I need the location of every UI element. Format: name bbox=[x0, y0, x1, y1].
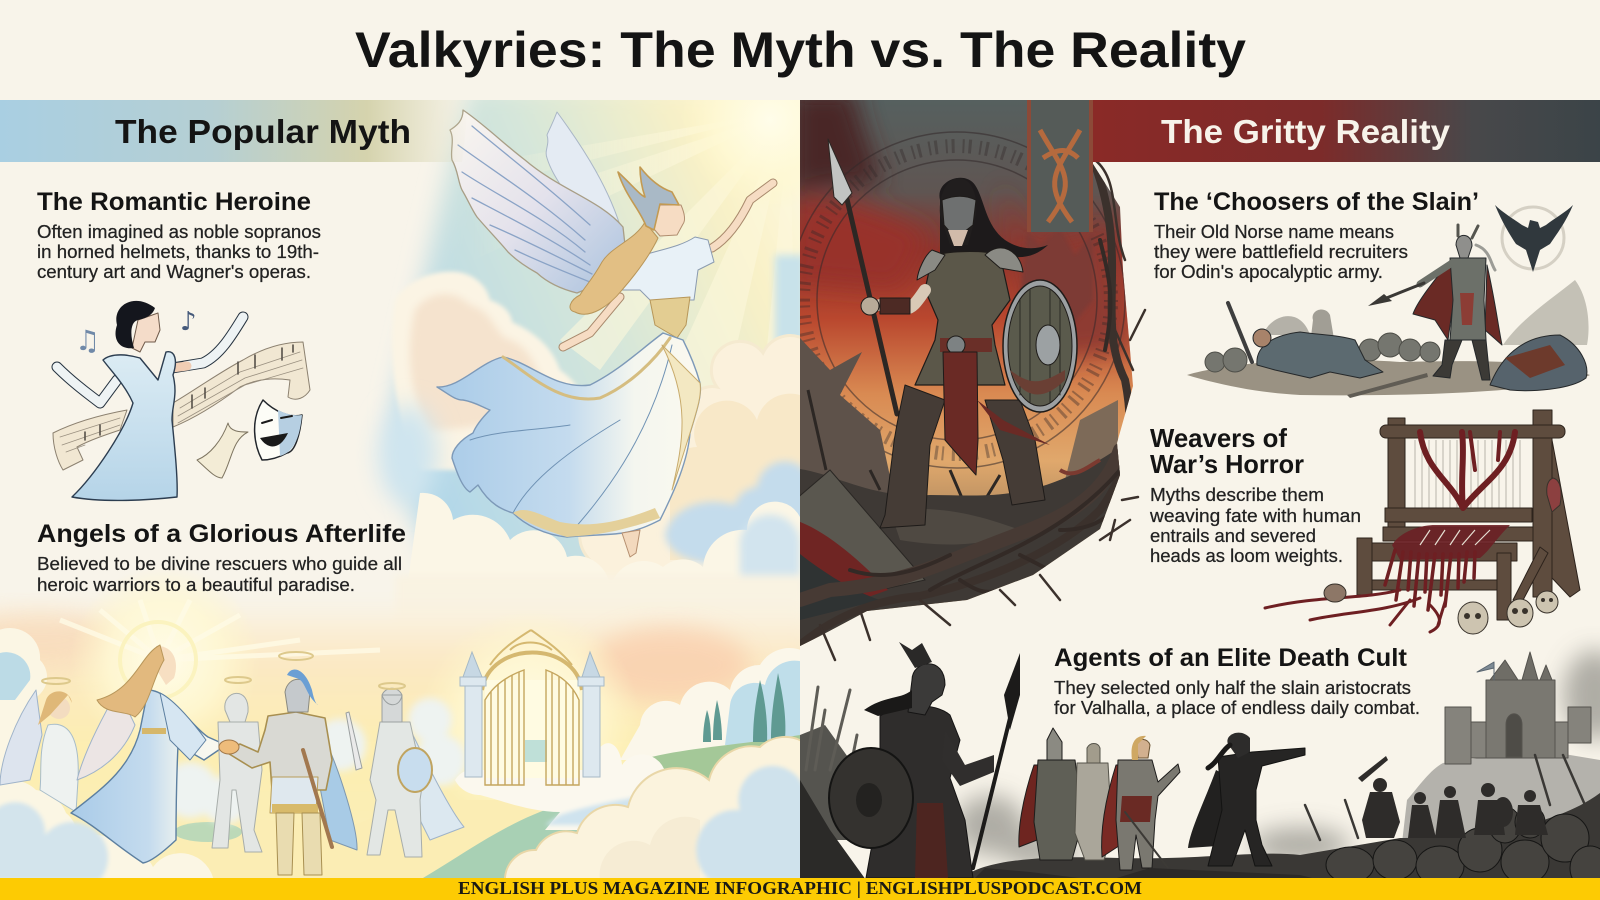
icon: soft clouds behind figures bbox=[162, 698, 466, 824]
footer bar: ENGLISH PLUS MAGAZINE INFOGRAPHIC | ENGLISHPLUSPODCAST.COM bbox=[458, 878, 1142, 898]
icon: castle flag bbox=[1477, 662, 1494, 680]
icon: pale warrior bbox=[1075, 744, 1112, 860]
icon: comedy mask bbox=[255, 400, 302, 460]
text block: angels of a glorious afterlife bbox=[37, 520, 406, 595]
icon: severed head bbox=[1547, 478, 1561, 512]
text block: weavers of war's horror bbox=[1149, 423, 1361, 566]
icon: ground and rubble bbox=[960, 793, 1600, 880]
illustration: loom with entrails and skulls bbox=[1265, 410, 1580, 634]
icon: round wooden shield bbox=[1003, 280, 1077, 412]
icon: front right cloud bbox=[505, 737, 805, 882]
icon: front wing bbox=[450, 110, 628, 293]
icon: tragedy mask bbox=[197, 423, 248, 478]
icon: music score ribbon bbox=[53, 342, 310, 470]
illustration: flying valkyrie bbox=[437, 110, 773, 557]
icon: rocks bbox=[800, 338, 895, 500]
icon: legs bbox=[880, 385, 1045, 528]
heading: the gritty reality: The Gritty Reality bbox=[1161, 113, 1451, 150]
icon: dark pointing figure bbox=[1188, 733, 1305, 866]
icon: head and dark hair bbox=[132, 313, 160, 352]
text block: the choosers of the slain: for Odin's apocalyptic army. bbox=[1154, 261, 1383, 282]
icon: outer branches bbox=[820, 160, 1145, 660]
icon: warrior with shield bbox=[346, 688, 464, 857]
icon: fallen warrior bbox=[1257, 332, 1383, 378]
icon: flowing hair bbox=[939, 178, 1048, 257]
text block: the choosers of the slain bbox=[1154, 188, 1479, 282]
text block: angels of a glorious afterlife: Angels of a Glorious Afterlife bbox=[37, 520, 406, 548]
text block: weavers of war's horror: heads as loom weights. bbox=[1150, 545, 1343, 566]
icon: peach cloud bbox=[392, 271, 586, 470]
icon: pauldrons bbox=[917, 250, 945, 280]
text block: agents of an elite death cult: They selected only half the slain aristocrats bbox=[1054, 677, 1411, 698]
icon: dark valkyrie bbox=[800, 642, 1020, 880]
text block: the choosers of the slain: they were battlefield recruiters bbox=[1154, 241, 1408, 262]
icon: cypress trees bbox=[703, 673, 785, 742]
icon: upper left cloud bbox=[0, 628, 47, 790]
illustration: warrior scene background bbox=[789, 90, 1145, 660]
icon: green hill bbox=[652, 735, 800, 778]
icon: gloved arms bbox=[57, 317, 243, 403]
icon: small angel bbox=[0, 690, 78, 812]
panel: the gritty reality bbox=[789, 90, 1600, 890]
icon: bare foot bbox=[622, 530, 640, 557]
icon: tangled dark ground bbox=[790, 440, 1130, 660]
text block: the romantic heroine: Often imagined as noble sopranos bbox=[37, 221, 321, 242]
icon: music notes: ♫ bbox=[75, 324, 100, 357]
icon: castle on a hill bbox=[1400, 750, 1600, 860]
illustration: valkyrie choosing among the slain bbox=[1187, 205, 1590, 398]
icon: gown bbox=[437, 333, 700, 537]
icon: rune circle bbox=[789, 132, 1125, 468]
illustration: angels greeting warriors bbox=[0, 645, 464, 875]
icon: winged helmet bbox=[618, 167, 679, 230]
text block: weavers of war's horror: War’s Horror bbox=[1150, 449, 1304, 479]
icon: front left cloud bbox=[0, 780, 214, 882]
text block: agents of an elite death cult: Agents of an Elite Death Cult bbox=[1054, 644, 1408, 672]
text block: the romantic heroine: in horned helmets, thanks to 19th- bbox=[37, 241, 319, 262]
icon: standing valkyrie bbox=[1368, 225, 1502, 380]
icon: front cream cloud bbox=[412, 492, 800, 580]
illustration: dark valkyrie and nobles bbox=[800, 642, 1600, 890]
text block: the romantic heroine bbox=[37, 188, 321, 282]
icon: clasped hands bbox=[219, 740, 239, 754]
icon: foreground rocks bbox=[973, 868, 1320, 880]
icon: armoured warrior shaking hands bbox=[219, 670, 357, 875]
icon: second fallen warrior bbox=[1490, 335, 1587, 391]
icon: arms bbox=[712, 183, 773, 248]
icon: torso armour bbox=[915, 251, 1010, 385]
text block: weavers of war's horror: weaving fate with human bbox=[1149, 505, 1361, 526]
text block: weavers of war's horror: Weavers of bbox=[1150, 423, 1287, 453]
text block: angels of a glorious afterlife: Believed to be divine rescuers who guide all bbox=[37, 553, 402, 574]
text block: agents of an elite death cult: for Valhalla, a place of endless daily combat. bbox=[1054, 697, 1420, 718]
icon: faded warrior left bbox=[212, 693, 262, 852]
icon: tabard bbox=[943, 352, 978, 475]
footer bar bbox=[0, 878, 1600, 900]
banner: the gritty reality bbox=[1093, 100, 1600, 162]
icon: gown bbox=[72, 352, 177, 500]
text block: the choosers of the slain: The ‘Choosers of the Slain’ bbox=[1154, 188, 1479, 216]
icon: hanging banner with knot bbox=[1027, 100, 1093, 232]
illustration: masked valkyrie with spear and shield bbox=[828, 139, 1077, 528]
banner: the popular myth bbox=[0, 100, 470, 162]
icon: torso bbox=[622, 236, 714, 300]
icon: blond noble bbox=[1102, 736, 1180, 870]
text block: the romantic heroine: The Romantic Heroine bbox=[37, 188, 311, 216]
icon: spear bbox=[828, 139, 897, 414]
illustration: bottom paradise scene background bbox=[0, 578, 800, 878]
icon: sword in ground bbox=[1228, 303, 1252, 362]
icon: back wing bbox=[546, 112, 620, 222]
text block: angels of a glorious afterlife: heroic warriors to a beautiful paradise. bbox=[37, 574, 355, 595]
icon: smoky battlefield bbox=[955, 650, 1600, 868]
panel: the popular myth bbox=[0, 100, 800, 878]
icon: arm with bracer bbox=[880, 290, 925, 308]
text block: agents of an elite death cult bbox=[1054, 644, 1420, 718]
text block: weavers of war's horror: Myths describe them bbox=[1150, 484, 1324, 505]
illustration: heavenly sky and clouds bbox=[369, 100, 800, 580]
heading: the popular myth: The Popular Myth bbox=[115, 113, 411, 150]
text block: the choosers of the slain: Their Old Norse name means bbox=[1154, 221, 1394, 242]
text block: weavers of war's horror: entrails and severed bbox=[1150, 525, 1316, 546]
icon: skulls bbox=[1324, 584, 1558, 634]
icon: raven emblem bbox=[1495, 205, 1573, 272]
icon: fighting silhouettes bbox=[1358, 756, 1548, 838]
icon: face bbox=[654, 204, 685, 236]
icon: misty hills and ground bbox=[1263, 280, 1589, 345]
icon: head with mask bbox=[940, 178, 976, 245]
icon: ground path bbox=[484, 800, 541, 814]
title: Valkyries: The Myth vs. The Reality bbox=[355, 22, 1246, 78]
icon: mid clouds by gate bbox=[455, 743, 664, 830]
illustration: golden gates of paradise bbox=[460, 630, 604, 785]
icon: large angel bbox=[71, 645, 226, 863]
icon: twisted tree roots bbox=[800, 165, 1130, 645]
icon: music note: ♪ bbox=[180, 307, 197, 337]
icon: noble warrior in red cloak bbox=[1019, 728, 1083, 860]
icon: hair bbox=[570, 222, 658, 314]
illustration: opera singer bbox=[53, 301, 310, 500]
icon: halos bbox=[42, 652, 405, 689]
text block: the romantic heroine: century art and Wagner's operas. bbox=[37, 261, 311, 282]
icon: right back cloud bbox=[578, 334, 800, 578]
icon: right back clouds bbox=[620, 648, 810, 760]
